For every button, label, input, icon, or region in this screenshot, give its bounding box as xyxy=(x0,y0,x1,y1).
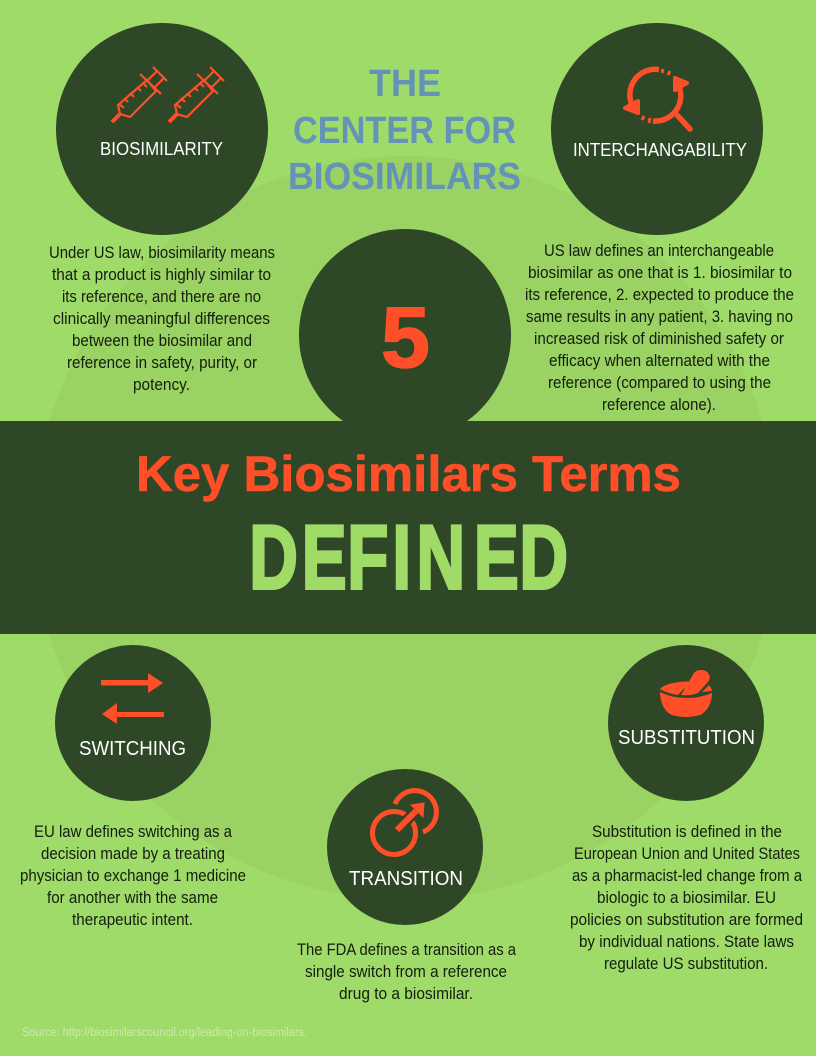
heading: defined: E xyxy=(302,507,347,608)
text: interchangability definition: efficacy when alternated with the xyxy=(549,352,770,370)
text: switching definition: physician to exchange 1 medicine xyxy=(20,867,246,885)
text: interchangability definition: biosimilar as one that is 1. biosimilar to xyxy=(528,264,792,282)
label: interchangability: INTERCHANGABILITY xyxy=(573,140,747,160)
text: substitution definition: policies on substitution are formed xyxy=(570,911,803,929)
text: substitution definition: by individual nations. State laws xyxy=(579,933,794,951)
text: substitution definition: Substitution is defined in the xyxy=(592,823,782,841)
panel: transition xyxy=(327,769,483,925)
text: substitution definition: biologic to a biosimilar. EU xyxy=(597,889,776,907)
label: switching: SWITCHING xyxy=(79,738,186,760)
heading: key biosimilars terms: Key Biosimilars Terms xyxy=(136,446,681,502)
text: biosimilarity definition: reference in safety, purity, or xyxy=(67,354,257,372)
text: biosimilarity definition: potency. xyxy=(133,376,190,394)
text: interchangability definition: its reference, 2. expected to produce the xyxy=(525,286,794,304)
text: switching definition: decision made by a treating xyxy=(41,845,225,863)
label: substitution: SUBSTITUTION xyxy=(618,727,755,749)
title: THE xyxy=(369,63,441,105)
heading: defined: I xyxy=(392,507,411,608)
text: switching definition: for another with the same xyxy=(47,889,218,907)
icon: syringes xyxy=(112,67,224,122)
text: switching definition: therapeutic intent. xyxy=(72,911,193,929)
icon: cycle arrows xyxy=(625,69,690,129)
panel: number five circle xyxy=(299,229,511,441)
icon: switching arrows xyxy=(101,673,164,724)
heading: defined: N xyxy=(416,507,465,608)
text: switching definition xyxy=(20,823,246,929)
text: biosimilarity definition: between the biosimilar and xyxy=(72,332,252,350)
text: biosimilarity definition: its reference, and there are no xyxy=(62,288,261,306)
text: biosimilarity definition xyxy=(49,244,275,394)
source: Source: http://biosimilarscouncil.org/leading-on-biosimilars. xyxy=(22,1027,307,1039)
text: transition definition: single switch from a reference xyxy=(305,963,507,981)
text: interchangability definition: same results in any patient, 3. having no xyxy=(526,308,793,326)
heading: defined: F xyxy=(347,507,388,608)
text: interchangability definition: reference alone). xyxy=(602,396,716,414)
banner xyxy=(0,421,816,634)
text: interchangability definition xyxy=(525,242,794,414)
panel: switching xyxy=(55,645,211,801)
title: BIOSIMILARS xyxy=(288,156,521,198)
background circle xyxy=(34,156,778,900)
text: interchangability definition: reference (compared to using the xyxy=(548,374,771,392)
label: transition: TRANSITION xyxy=(349,868,463,890)
text: transition definition xyxy=(297,941,517,1003)
text: biosimilarity definition: clinically meaningful differences xyxy=(53,310,270,328)
text: switching definition: EU law defines switching as a xyxy=(34,823,233,841)
number 5: 5 xyxy=(381,290,430,386)
heading: defined: D xyxy=(249,507,298,608)
panel: substitution xyxy=(608,645,764,801)
text: interchangability definition: increased risk of diminished safety or xyxy=(534,330,784,348)
icon: mortar and pestle xyxy=(660,670,712,717)
panel: interchangability xyxy=(551,23,763,235)
title xyxy=(288,63,521,198)
text: transition definition: drug to a biosimilar. xyxy=(339,985,473,1003)
heading: defined: E xyxy=(474,507,519,608)
text: substitution definition: regulate US substitution. xyxy=(604,955,768,973)
title: CENTER FOR xyxy=(293,110,516,152)
text: transition definition: The FDA defines a transition as a xyxy=(297,941,517,959)
text: interchangability definition: US law defines an interchangeable xyxy=(544,242,774,260)
text: substitution definition xyxy=(570,823,803,973)
icon: transition rings and arrow xyxy=(372,791,436,854)
heading: defined: D xyxy=(519,507,568,608)
label: biosimilarity: BIOSIMILARITY xyxy=(100,139,223,159)
text: biosimilarity definition: Under US law, biosimilarity means xyxy=(49,244,275,262)
panel: biosimilarity xyxy=(56,23,268,235)
text: biosimilarity definition: that a product is highly similar to xyxy=(52,266,271,284)
